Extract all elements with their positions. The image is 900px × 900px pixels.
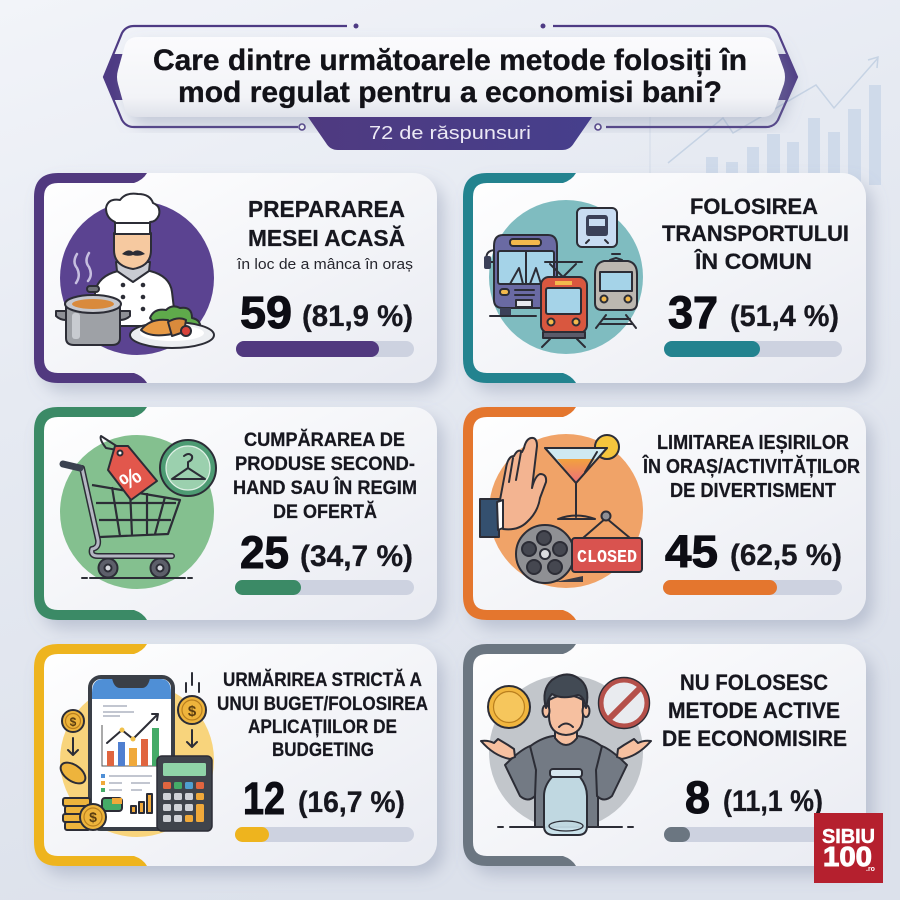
progress bar [235,827,414,842]
heading: DE DIVERTISMENT [670,480,836,502]
logo: Sibiu 100: 100 [823,841,872,872]
panel: folosirea transportului în comun [463,173,866,383]
heading: URMĂRIREA STRICTĂ A [223,668,422,691]
heading: CUMPĂRAREA DE [244,428,405,451]
icon: public transport [484,200,643,354]
heading [248,196,405,251]
logo: Sibiu 100: .ro [866,866,875,873]
icon: budgeting phone and calculator: $ [188,703,197,720]
heading: ÎN COMUN [694,249,812,274]
panel: nu folosesc metode active [463,644,866,866]
icon: hand, cocktail, film reel, closed sign [480,434,643,588]
icon: shopping cart with tag [60,435,216,589]
heading [233,428,417,523]
heading: METODE ACTIVE [668,698,840,723]
heading: HAND SAU ÎN REGIM [233,475,417,499]
value [665,526,842,577]
heading: NU FOLOSESC [680,670,828,695]
card base [463,644,866,866]
logo: Sibiu 100 [814,813,883,883]
heading [662,670,847,751]
icon: budgeting phone and calculator: $ [89,809,97,825]
value [685,772,823,823]
heading: MESEI ACASĂ [248,224,405,251]
panel: prepararea mesei acasă [34,173,437,383]
title banner [103,24,797,150]
banner plate [117,37,785,117]
progress bar [664,827,842,842]
card base [463,173,866,383]
heading: PREPARAREA [248,196,405,222]
value: (16,7 %) [298,786,405,819]
heading: APLICAȚIILOR DE [248,716,397,738]
title text: Care dintre următoarele metode folosiți în [153,44,747,77]
progress bar [664,341,842,357]
title text [153,44,747,109]
heading: UNUI BUGET/FOLOSIREA [217,693,428,715]
card base [34,644,437,866]
value: 37 [668,287,718,338]
icon: shopping cart with tag: % [114,462,146,495]
value [243,773,405,824]
icon: budgeting phone and calculator [57,673,214,837]
subheading: în loc de a mânca în oraș [236,256,413,273]
icon: chef with pot and plate [56,194,214,355]
card base [463,407,866,620]
card accent [463,173,576,383]
value: (34,7 %) [300,540,413,573]
value [668,287,839,338]
value: 25 [240,527,289,578]
panel: limitarea ieșirilor [463,407,866,620]
value: (81,9 %) [302,300,413,333]
value: 59 [240,287,292,338]
progress bar [236,341,414,357]
value: (11,1 %) [723,785,823,818]
progress bar [663,580,842,595]
heading [217,668,428,761]
card base [34,407,437,620]
heading: FOLOSIREA [690,194,818,219]
card accent [463,644,576,866]
card accent [34,407,147,620]
value: 12 [243,773,285,824]
value [240,287,413,338]
banner outline [104,26,797,127]
title text: mod regulat pentru a economisi bani? [178,76,722,109]
heading [662,194,849,274]
card base [34,173,437,383]
heading: ÎN ORAȘ/ACTIVITĂȚILOR [642,454,860,478]
logo: Sibiu 100: SIBIU [822,826,875,848]
heading: DE ECONOMISIRE [662,726,847,751]
icon: budgeting phone and calculator: $ [70,715,77,729]
value: (62,5 %) [730,539,842,572]
heading [642,432,860,502]
value [240,527,413,578]
heading: LIMITAREA IEȘIRILOR [657,432,850,454]
heading: BUDGETING [272,739,374,761]
heading: TRANSPORTULUI [662,221,849,246]
heading: DE OFERTĂ [273,500,377,523]
responses tab [308,117,592,150]
card accent [34,644,147,866]
panel: urmărirea strictă a unui buget [34,644,437,866]
responses count: 72 de răspunsuri [369,123,531,143]
value: (51,4 %) [730,300,839,333]
value: 45 [665,526,718,577]
icon: person with empty jar [481,674,651,835]
banner side wedges [103,54,128,100]
panel: cumpărarea de produse second-hand [34,407,437,620]
card accent [34,173,147,383]
icon: hand, cocktail, film reel, closed sign: CLOSED [577,548,637,568]
heading: PRODUSE SECOND- [235,453,415,475]
value: 8 [685,772,710,823]
card accent [463,407,576,620]
progress bar [235,580,414,595]
background chart decoration [650,57,881,187]
